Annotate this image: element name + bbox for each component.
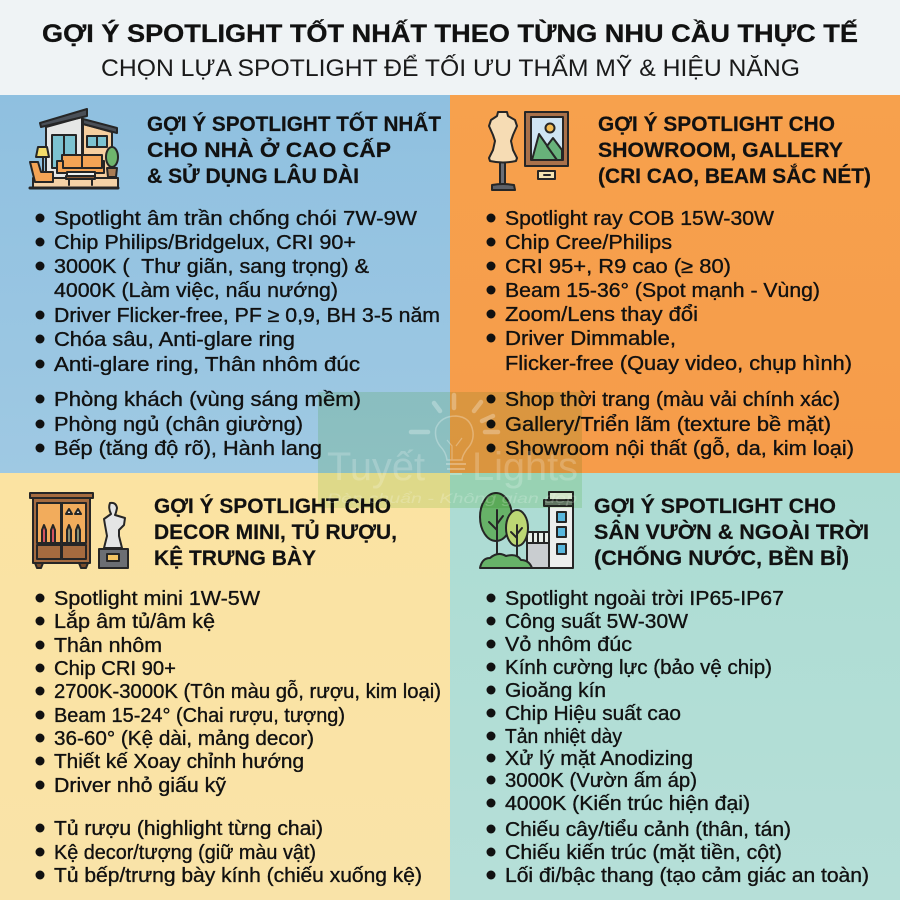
list: mini decor applications: Tủ rượu (highlight từng chai) <box>54 818 323 840</box>
subtitle: CHỌN LỰA SPOTLIGHT ĐỂ TỐI ƯU THẨM MỸ & HIỆU NĂNG <box>101 54 800 82</box>
list: showroom specs: Beam 15-36° (Spot mạnh - Vùng) <box>505 280 820 302</box>
list: garden specs and applications <box>486 588 869 887</box>
icon: trees and building <box>480 492 573 568</box>
heading: mini decor: KỆ TRƯNG BÀY <box>154 545 316 570</box>
list: showroom specs: Spotlight ray COB 15W-30W <box>505 208 774 230</box>
watermark wordmark: Tuyết <box>327 445 425 489</box>
list: showroom applications <box>486 389 854 460</box>
icon: light bulb with rays <box>411 395 498 474</box>
heading: luxury home: & SỬ DỤNG LÂU DÀI <box>147 163 359 188</box>
list: mini decor specs: Thân nhôm <box>54 635 162 657</box>
header band <box>0 0 900 95</box>
list: luxury home specs: 3000K ( Thư giãn, sang trọng) & <box>54 256 370 278</box>
list: showroom applications: Gallery/Triển lãm (texture bề mặt) <box>505 414 831 436</box>
list: luxury home applications: Bếp (tăng độ rõ), Hành lang <box>54 438 322 460</box>
list: garden specs and applications: Vỏ nhôm đúc <box>505 634 632 656</box>
list: luxury home specs: Chip Philips/Bridgelux, CRI 90+ <box>54 232 356 254</box>
list: luxury home specs: Anti-glare ring, Thân nhôm đúc <box>54 354 360 376</box>
list: mini decor applications: Kệ decor/tượng (giữ màu vật) <box>54 842 316 864</box>
list: showroom specs: Flicker-free (Quay video, chụp hình) <box>505 353 852 375</box>
list: mini decor specs <box>36 588 441 797</box>
watermark: Tuyết Lights logo <box>318 392 582 508</box>
title: GỢI Ý SPOTLIGHT TỐT NHẤT THEO TỪNG NHU CẦU THỰC TẾ <box>42 18 858 48</box>
heading: showroom and gallery <box>598 111 871 188</box>
list: garden specs and applications: 3000K (Vườn ấm áp) <box>505 770 697 792</box>
list: garden specs and applications: Gioăng kín <box>505 680 606 702</box>
icon: modern house with sofa <box>30 109 118 188</box>
list: mini decor specs: Beam 15-24° (Chai rượu, tượng) <box>54 705 345 727</box>
list: luxury home specs: Driver Flicker-free, PF ≥ 0,9, BH 3-5 năm <box>54 305 440 327</box>
watermark tagline: Đèn chuẩn - Không gian đẹp <box>327 490 577 506</box>
heading: mini decor: DECOR MINI, TỦ RƯỢU, <box>154 519 397 544</box>
panel: mini decor and wine cabinet <box>0 473 450 900</box>
list: garden specs and applications: Công suất 5W-30W <box>505 611 688 633</box>
list: garden specs and applications: Chiếu kiến trúc (mặt tiền, cột) <box>505 842 782 864</box>
list: garden specs and applications: Xử lý mặt Anodizing <box>505 748 693 770</box>
heading: garden and outdoor: SÂN VƯỜN & NGOÀI TRỜI <box>594 519 869 544</box>
heading: garden and outdoor: GỢI Ý SPOTLIGHT CHO <box>594 493 836 518</box>
list: luxury home applications: Phòng khách (vùng sáng mềm) <box>54 389 361 411</box>
heading: luxury home: CHO NHÀ Ở CAO CẤP <box>147 137 391 162</box>
list: luxury home applications <box>36 389 361 460</box>
watermark wordmark <box>327 445 578 489</box>
heading: luxury home <box>147 110 441 188</box>
list: mini decor specs: 2700K-3000K (Tôn màu gỗ, rượu, kim loại) <box>54 680 441 703</box>
icon: wine cabinet and statue <box>30 493 128 568</box>
heading: garden and outdoor <box>594 493 869 570</box>
list: mini decor specs: Lắp âm tủ/âm kệ <box>54 610 215 633</box>
list: mini decor specs: 36-60° (Kệ dài, mảng decor) <box>54 728 314 750</box>
icon: mannequin and framed picture <box>489 112 568 190</box>
list: showroom specs: Zoom/Lens thay đổi <box>505 304 698 326</box>
list: garden specs and applications: 4000K (Kiến trúc hiện đại) <box>505 793 750 815</box>
list: garden specs and applications: Chiếu cây/tiểu cảnh (thân, tán) <box>505 819 791 841</box>
list: showroom specs: Driver Dimmable, <box>505 328 676 350</box>
list: mini decor applications: Tủ bếp/trưng bày kính (chiếu xuống kệ) <box>54 865 422 887</box>
list: garden specs and applications: Chip Hiệu suất cao <box>505 703 681 725</box>
list: mini decor specs: Thiết kế Xoay chỉnh hướng <box>54 751 304 773</box>
heading: mini decor: GỢI Ý SPOTLIGHT CHO <box>154 493 391 518</box>
list: luxury home specs: Chóa sâu, Anti-glare ring <box>54 329 295 351</box>
panel: garden and outdoor <box>450 473 900 900</box>
panel: showroom and gallery <box>450 95 900 473</box>
list: showroom specs: CRI 95+, R9 cao (≥ 80) <box>505 256 731 278</box>
list: showroom specs <box>486 208 852 375</box>
list: garden specs and applications: Kính cường lực (bảo vệ chip) <box>505 657 772 679</box>
list: luxury home applications: Phòng ngủ (chân giường) <box>54 414 303 436</box>
list: mini decor applications <box>36 818 422 887</box>
list: mini decor specs: Chip CRI 90+ <box>54 658 176 680</box>
list: garden specs and applications: Lối đi/bậc thang (tạo cảm giác an toàn) <box>505 865 869 887</box>
heading: showroom and gallery: SHOWROOM, GALLERY <box>598 138 843 162</box>
list: luxury home specs <box>36 208 440 376</box>
list: mini decor specs: Driver nhỏ giấu kỹ <box>54 775 226 797</box>
heading: showroom and gallery: GỢI Ý SPOTLIGHT CHO <box>598 111 835 136</box>
list: showroom specs: Chip Cree/Philips <box>505 232 672 254</box>
list: showroom applications: Shop thời trang (màu vải chính xác) <box>505 389 840 411</box>
heading: luxury home: GỢI Ý SPOTLIGHT TỐT NHẤT <box>147 110 441 136</box>
list: luxury home specs: 4000K (Làm việc, nấu nướng) <box>54 280 338 302</box>
list: luxury home specs: Spotlight âm trần chống chói 7W-9W <box>54 208 417 230</box>
list: garden specs and applications: Spotlight ngoài trời IP65-IP67 <box>505 588 784 610</box>
heading: mini decor <box>154 493 397 570</box>
panel: luxury home <box>0 95 450 473</box>
heading: showroom and gallery: (CRI CAO, BEAM SẮC NÉT) <box>598 163 871 188</box>
list: mini decor specs: Spotlight mini 1W-5W <box>54 588 260 610</box>
list: garden specs and applications: Tản nhiệt dày <box>505 726 622 748</box>
list: showroom applications: Showroom nội thất (gỗ, da, kim loại) <box>505 437 854 460</box>
watermark wordmark: Lights <box>472 445 578 489</box>
heading: garden and outdoor: (CHỐNG NƯỚC, BỀN BỈ) <box>594 544 849 570</box>
